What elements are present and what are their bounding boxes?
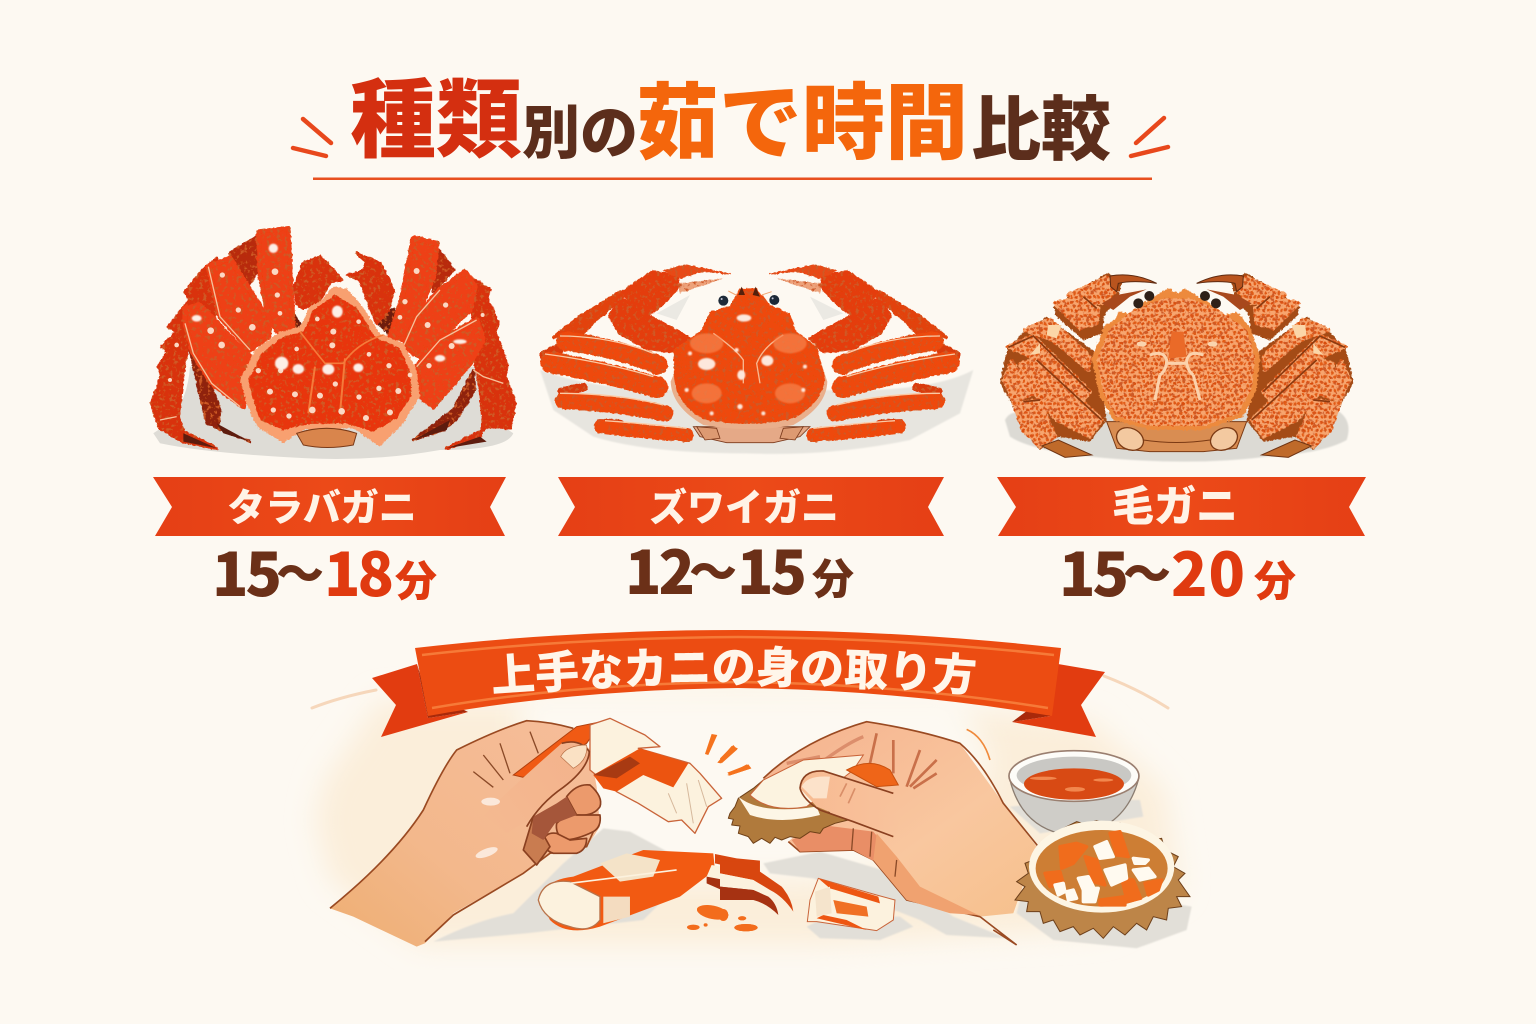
sauce [1024, 768, 1124, 800]
boiling time: 12 [625, 525, 693, 612]
crab illustration: hairy crab [1000, 273, 1353, 462]
boiling time: 分 [395, 548, 437, 609]
boiling time: 分 [812, 546, 854, 607]
sauce bowl [1009, 751, 1139, 834]
left hand with crab leg [330, 718, 760, 947]
shell filled with crab meat [1015, 821, 1190, 938]
shell held in hand [728, 755, 898, 843]
boiling time: 〜 [689, 533, 737, 603]
title text: 茹で時間 [636, 56, 968, 176]
meat chunks [1045, 832, 1162, 905]
boiling time: 18 [324, 527, 392, 614]
species name: タラバガニ [227, 477, 417, 532]
left half of legs and claw [1000, 273, 1157, 457]
right accent marks [1131, 118, 1168, 156]
juice drops [687, 902, 758, 931]
column: タラバガニ [152, 228, 515, 614]
title underline [313, 178, 1152, 180]
column: ズワイガニ [540, 265, 973, 612]
scene background wash [315, 690, 1180, 945]
boiling time: 20 [1171, 527, 1246, 614]
species banner [997, 473, 1366, 536]
eyes [1133, 291, 1221, 308]
column: 毛ガニ [997, 273, 1366, 614]
crab leg piece on table [538, 850, 760, 930]
boiling time: 15 [1059, 527, 1127, 614]
motion marks [720, 745, 751, 775]
crab shell fragment on table [807, 878, 895, 931]
hand [763, 722, 1037, 917]
thumb [483, 742, 589, 833]
title [293, 50, 1168, 180]
curled fingers [523, 785, 601, 865]
species name: ズワイガニ [649, 477, 839, 532]
left half of legs and claw [545, 265, 730, 435]
thumb [800, 771, 907, 833]
boiling time: 〜 [1123, 535, 1171, 605]
boiling time: 15 [737, 525, 805, 612]
species banner [153, 477, 506, 536]
shell highlights [685, 314, 807, 415]
claw tip [720, 861, 793, 915]
title text: 比較 [971, 74, 1111, 175]
hand [330, 721, 600, 947]
motion arc [967, 729, 990, 760]
boiling time: 分 [1254, 548, 1296, 609]
right hand with shell [718, 722, 1192, 948]
motion marks [705, 734, 751, 776]
carapace [1092, 288, 1260, 430]
shell spots [168, 268, 485, 421]
species banner [558, 477, 944, 536]
crab illustration: snow crab [540, 265, 973, 454]
ribbon text: 上手なカニの身の取り方 [493, 646, 976, 694]
juice drops [718, 909, 758, 931]
boiling time: 15 [212, 527, 280, 614]
crab illustration: king crab [152, 228, 515, 459]
eyes [718, 295, 779, 306]
title text: 別の [522, 86, 638, 170]
crab leg being pulled [513, 718, 722, 833]
species name: 毛ガニ [1112, 473, 1238, 534]
title text: 種類 [350, 50, 522, 175]
carapace [671, 330, 827, 429]
decorative arc lines [312, 676, 1168, 708]
carapace [240, 287, 420, 447]
ribbon heading [372, 630, 1105, 737]
section: how to remove crab meat [310, 630, 1192, 950]
boiling time: 〜 [276, 535, 324, 605]
left accent marks [293, 119, 331, 156]
